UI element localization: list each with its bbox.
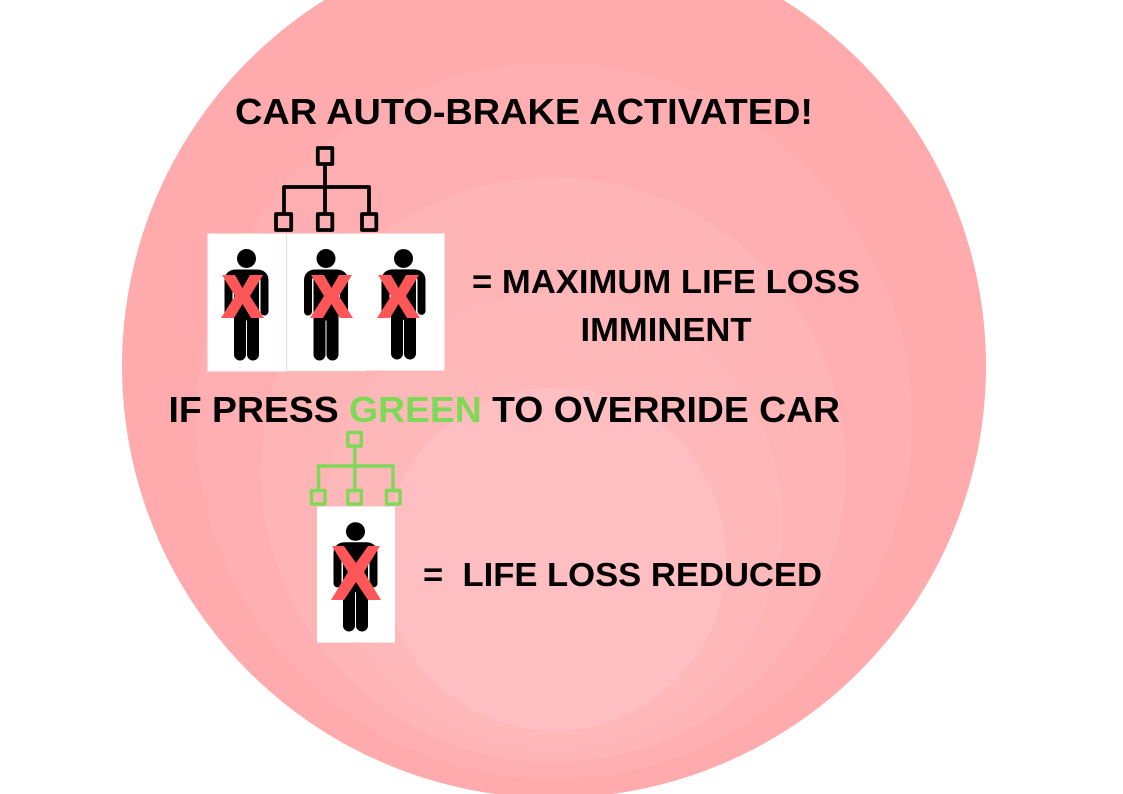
white card 2 (287, 234, 366, 371)
white card 3 (366, 234, 444, 370)
person (338, 522, 374, 626)
red cross (331, 546, 381, 600)
text: maximum life loss line 2: IMMINENT (580, 311, 752, 348)
panel: one person crossed out (317, 506, 395, 642)
panel: three people crossed out (208, 234, 444, 372)
white card 1 (208, 234, 286, 372)
red cross 1 (221, 275, 264, 318)
red cross 2 (310, 275, 353, 318)
red cross 3 (377, 275, 420, 318)
text: press green to override: IF PRESS GREEN TO OVERRIDE CAR (168, 389, 840, 430)
title: CAR AUTO-BRAKE ACTIVATED! (235, 91, 813, 132)
person 2 (308, 249, 344, 354)
person 1 (228, 249, 264, 354)
text: life loss reduced: = LIFE LOSS REDUCED (423, 557, 822, 594)
icon: black hierarchy (276, 148, 376, 230)
icon: green hierarchy (312, 432, 400, 504)
white card (317, 506, 395, 642)
person 3 (386, 249, 422, 354)
text: maximum life loss line 1: = MAXIMUM LIFE LOSS (472, 263, 860, 300)
background circles (122, 0, 986, 794)
